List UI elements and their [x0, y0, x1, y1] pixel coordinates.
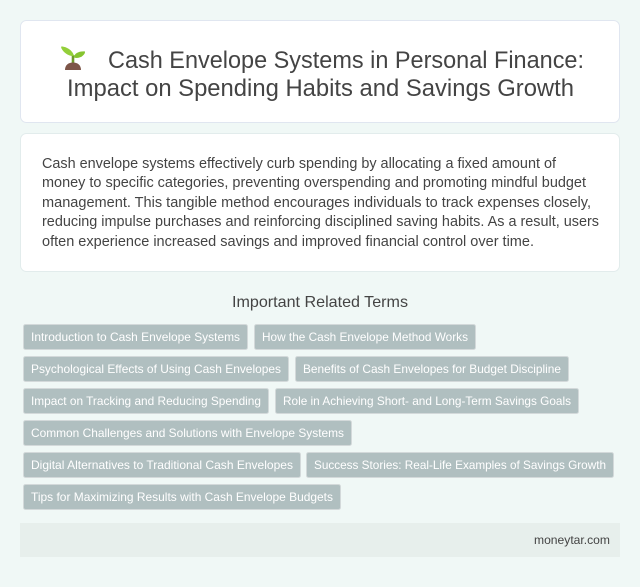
- chip: Introduction to Cash Envelope Systems: [31, 330, 240, 344]
- chip: [24, 484, 340, 510]
- title panel: [20, 20, 620, 122]
- description panel: [20, 134, 620, 272]
- description text: management. This tangible method encourages individuals to track expenses closely,: [42, 195, 591, 211]
- chip: [24, 452, 300, 478]
- chip: [24, 356, 288, 382]
- chip: [296, 356, 568, 382]
- chip: How the Cash Envelope Method Works: [262, 330, 468, 344]
- icon: seedling: [61, 46, 85, 70]
- chip: [24, 324, 248, 350]
- description text: money to specific categories, preventing overspending and promoting mindful budget: [42, 175, 586, 191]
- chip: Digital Alternatives to Traditional Cash Envelopes: [31, 458, 293, 472]
- chip: Role in Achieving Short- and Long-Term Savings Goals: [283, 394, 571, 408]
- chip: Success Stories: Real-Life Examples of Savings Growth: [314, 458, 606, 472]
- footer text: moneytar.com: [534, 533, 610, 547]
- title text: Cash Envelope Systems in Personal Finance:: [108, 47, 584, 74]
- description text: reducing impulse purchases and reinforcing disciplined saving habits. As a result, users: [42, 214, 599, 230]
- chip: [24, 388, 268, 414]
- chip: [276, 388, 578, 414]
- title text: Impact on Spending Habits and Savings Growth: [67, 75, 574, 102]
- description text: [42, 156, 599, 250]
- chip: Common Challenges and Solutions with Envelope Systems: [31, 426, 344, 440]
- section heading: Important Related Terms: [232, 294, 408, 311]
- chip: Psychological Effects of Using Cash Envelopes: [31, 362, 281, 376]
- chip: Impact on Tracking and Reducing Spending: [31, 394, 261, 408]
- title text: [67, 47, 584, 102]
- related terms chips: [24, 324, 614, 510]
- description text: Cash envelope systems effectively curb spending by allocating a fixed amount of: [42, 156, 557, 172]
- description text: often experience increased savings and improved financial control over time.: [42, 234, 534, 250]
- footer bar: [20, 523, 620, 557]
- chip: [254, 324, 476, 350]
- chip: Benefits of Cash Envelopes for Budget Discipline: [303, 362, 561, 376]
- chip: Tips for Maximizing Results with Cash Envelope Budgets: [31, 490, 333, 504]
- chip: [24, 420, 352, 446]
- chip: [306, 452, 614, 478]
